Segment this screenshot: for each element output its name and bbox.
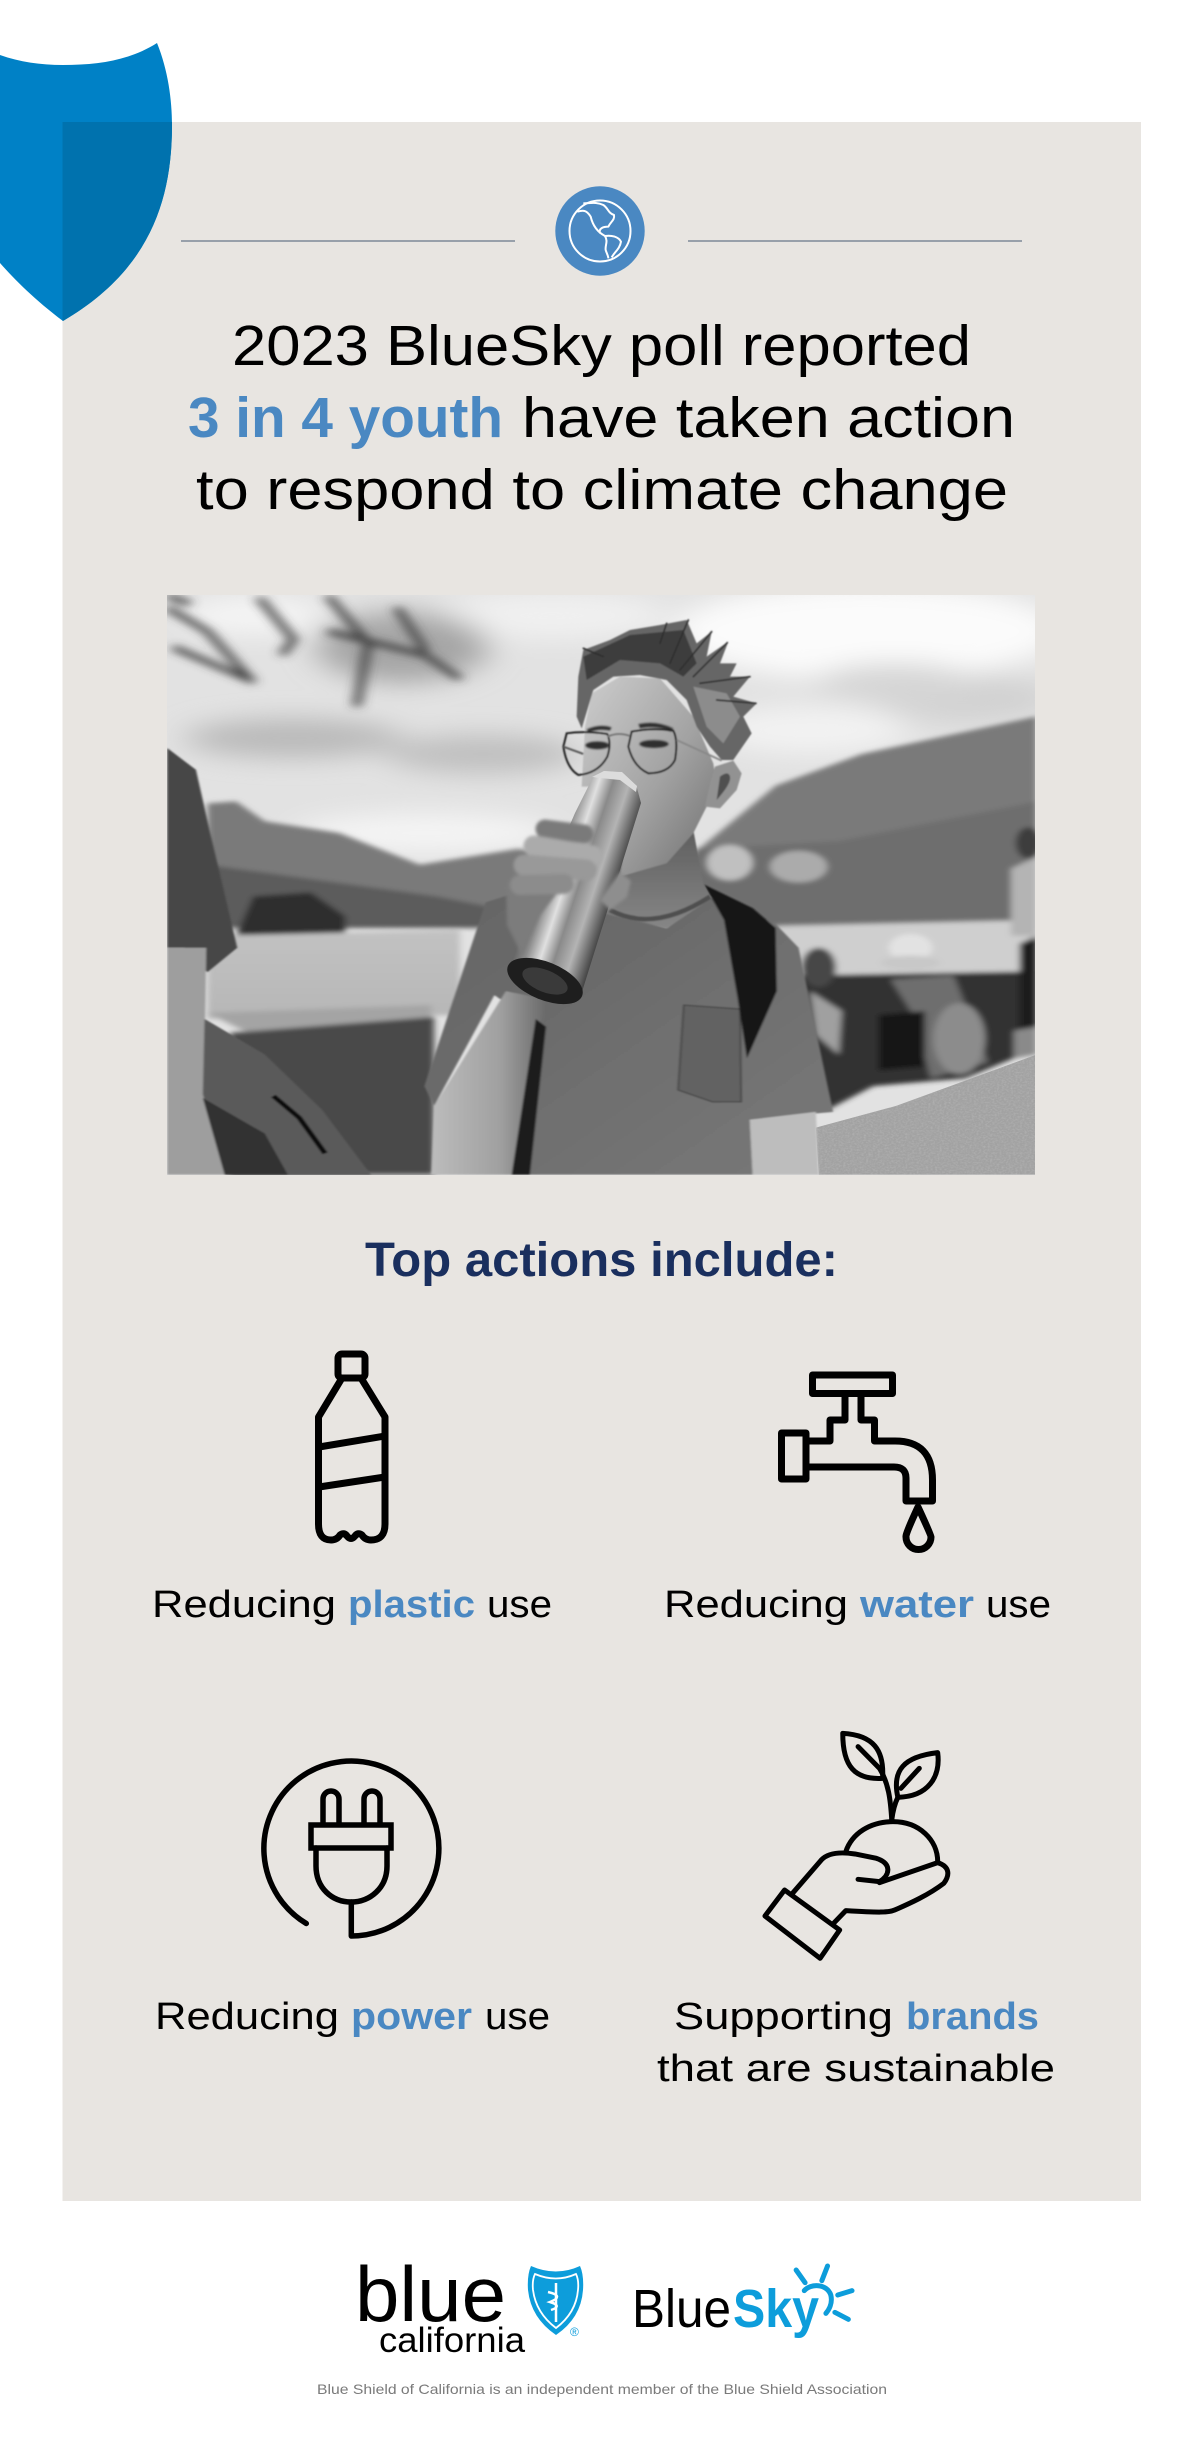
title: 3 in 4 youth — [188, 386, 503, 450]
boy head and glasses — [563, 620, 757, 928]
background panel — [62, 122, 1141, 2201]
title: have taken action — [522, 386, 1015, 450]
label: power: power — [351, 1996, 472, 2038]
logo: blue california: california — [379, 2321, 526, 2360]
label: plastic: Reducing — [152, 1584, 336, 1626]
heading: top actions: Top actions include: — [365, 1234, 838, 1287]
label: power: use — [485, 1996, 550, 2038]
icon: hand holding plant — [765, 1733, 948, 1958]
rock ledge — [816, 1054, 1037, 1175]
divider with globe icon — [181, 186, 1022, 276]
label: brands: that are sustainable — [657, 2048, 1055, 2090]
boy body — [424, 884, 833, 1175]
logo: blue california — [355, 2250, 583, 2360]
label: plastic: plastic — [348, 1584, 475, 1626]
tree branches — [167, 596, 460, 707]
label: power: Reducing — [155, 1996, 339, 2038]
action: reducing water use — [664, 1375, 1051, 1626]
title: to respond to climate change — [196, 458, 1008, 522]
left person and backpack — [167, 748, 371, 1175]
title — [188, 314, 1015, 522]
footnote: Blue Shield of California is an independent member of the Blue Shield Association — [317, 2381, 887, 2397]
logo: blue california: blue — [355, 2250, 506, 2338]
label: power — [155, 1996, 550, 2038]
hand gripping bottle — [506, 825, 631, 955]
arms — [431, 991, 546, 1175]
logo: BlueSky: Sky — [733, 2279, 819, 2339]
action: reducing plastic use — [152, 1354, 552, 1626]
icon: sun rays — [796, 2266, 852, 2319]
icon: bottle — [318, 1354, 385, 1540]
label: plastic — [152, 1584, 552, 1626]
label: water: use — [986, 1584, 1051, 1626]
logo: BlueSky — [632, 2266, 852, 2339]
icon: plug — [264, 1761, 439, 1936]
icon: shield with staff: ® — [570, 2325, 579, 2339]
shield decoration — [0, 43, 172, 321]
label: brands: brands — [906, 1996, 1039, 2038]
action: supporting brands — [657, 1733, 1055, 2090]
backpack strap — [704, 884, 777, 1058]
icon: shield with staff — [528, 2266, 583, 2339]
label: water: water — [859, 1584, 974, 1626]
pocket — [678, 1005, 741, 1102]
icon: tap — [782, 1375, 932, 1550]
label: brands: Supporting — [674, 1996, 893, 2038]
label: brands — [657, 1996, 1055, 2090]
metal bottle — [501, 771, 641, 1014]
label: plastic: use — [487, 1584, 552, 1626]
logo: BlueSky: Blue — [632, 2279, 731, 2339]
t-shirt — [424, 892, 833, 1175]
icon: globe — [555, 186, 645, 276]
photo: boy drinking from metal bottle — [167, 584, 1063, 1175]
label: water — [664, 1584, 1051, 1626]
title: 2023 BlueSky poll reported — [232, 314, 971, 378]
action: reducing power use — [155, 1761, 550, 2038]
label: water: Reducing — [664, 1584, 848, 1626]
sky and clouds — [167, 584, 1063, 853]
mountains, water and wall background — [207, 716, 1041, 1175]
